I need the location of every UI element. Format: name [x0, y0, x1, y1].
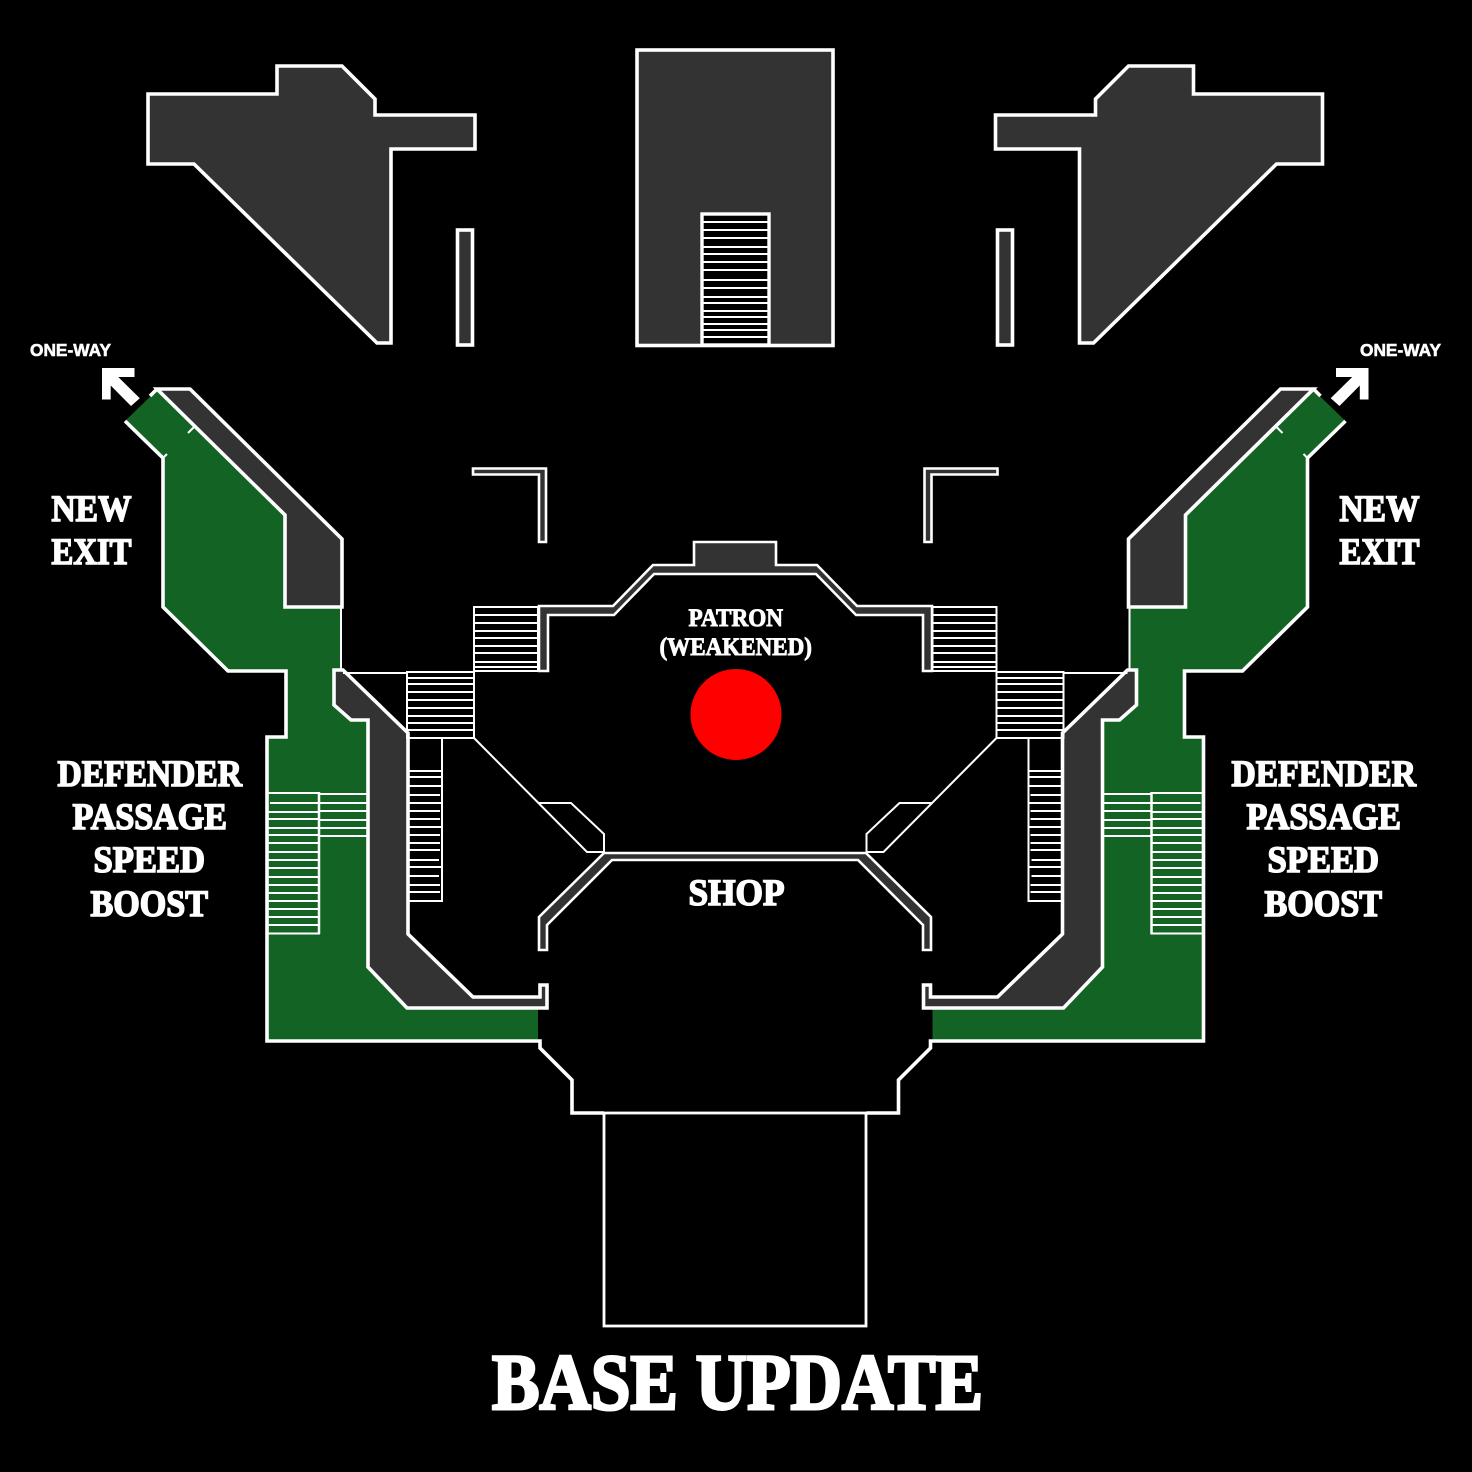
green defender passage: [125, 390, 538, 1041]
label: patron weakened: (WEAKENED): [660, 634, 812, 661]
label: left defender passage speed boost: DEFENDER: [58, 754, 243, 795]
left bracket wall: [473, 468, 546, 542]
rear room outline: [604, 1113, 866, 1326]
grey exit corridor: [157, 389, 342, 607]
label: patron weakened: PATRON: [688, 605, 783, 632]
stairs lower vertical: [409, 738, 442, 901]
top right spawn room: [996, 66, 1322, 343]
label: left defender passage speed boost: BOOST: [90, 884, 208, 925]
thin diagonal walls toward shop: [866, 738, 996, 852]
one-way arrow: [102, 368, 140, 406]
label: right defender passage speed boost: SPEED: [1268, 840, 1379, 881]
thin side wall: [1128, 607, 1130, 670]
thin line to upper stairs: [343, 672, 407, 674]
label: right one-way: ONE-WAY: [1360, 340, 1441, 360]
stairs middle: [407, 672, 474, 738]
one-way arrow: [1331, 368, 1368, 406]
label: left defender passage speed boost: [58, 754, 243, 925]
title: BASE UPDATE: [492, 1340, 983, 1427]
label: right defender passage speed boost: DEFENDER: [1232, 754, 1417, 795]
label: right new exit: [1340, 489, 1420, 573]
grey lower corridor: [334, 670, 547, 1008]
label: shop: SHOP: [688, 873, 784, 914]
grey exit corridor: [1128, 389, 1314, 607]
right wing: [866, 368, 1368, 1113]
stairs upper: [932, 607, 998, 671]
top left spawn room: [148, 66, 475, 343]
shop wall: [539, 853, 931, 950]
label: left new exit: NEW: [52, 489, 132, 530]
label: left defender passage speed boost: PASSAGE: [72, 797, 227, 838]
top right pillar: [998, 230, 1012, 345]
label: right defender passage speed boost: [1232, 754, 1417, 925]
grey lower corridor: [924, 670, 1136, 1008]
label: right defender passage speed boost: BOOST: [1264, 884, 1382, 925]
green stairs small: [1104, 794, 1152, 836]
patron marker: [690, 669, 782, 760]
green stairs large: [1150, 792, 1202, 934]
outer wall: [866, 389, 1346, 1113]
green stairs small: [319, 794, 367, 836]
green defender passage: [932, 390, 1346, 1041]
right bracket wall: [924, 468, 998, 542]
label: left new exit: EXIT: [52, 532, 132, 573]
top centre room with stairs: [637, 50, 833, 346]
label: right new exit: NEW: [1340, 489, 1420, 530]
green stairs large: [268, 792, 320, 934]
thin diagonal walls toward shop: [474, 738, 604, 852]
wall ticks: [163, 426, 195, 458]
label: right defender passage speed boost: PASSAGE: [1246, 797, 1401, 838]
top left pillar: [458, 230, 472, 345]
label: left new exit: [52, 489, 132, 573]
label: right new exit: EXIT: [1340, 532, 1420, 573]
patron room wall: [539, 542, 932, 671]
left wing: [102, 368, 604, 1113]
label: patron weakened: [660, 605, 812, 661]
wall ticks: [1276, 426, 1308, 458]
stairs lower vertical: [1028, 738, 1062, 901]
label: left one-way: ONE-WAY: [30, 340, 111, 360]
label: left defender passage speed boost: SPEED: [94, 840, 205, 881]
outer wall: [125, 389, 604, 1113]
thin side wall: [340, 607, 342, 670]
thin line to upper stairs: [1064, 672, 1128, 674]
stairs middle: [996, 672, 1064, 738]
stairs upper: [473, 607, 538, 671]
